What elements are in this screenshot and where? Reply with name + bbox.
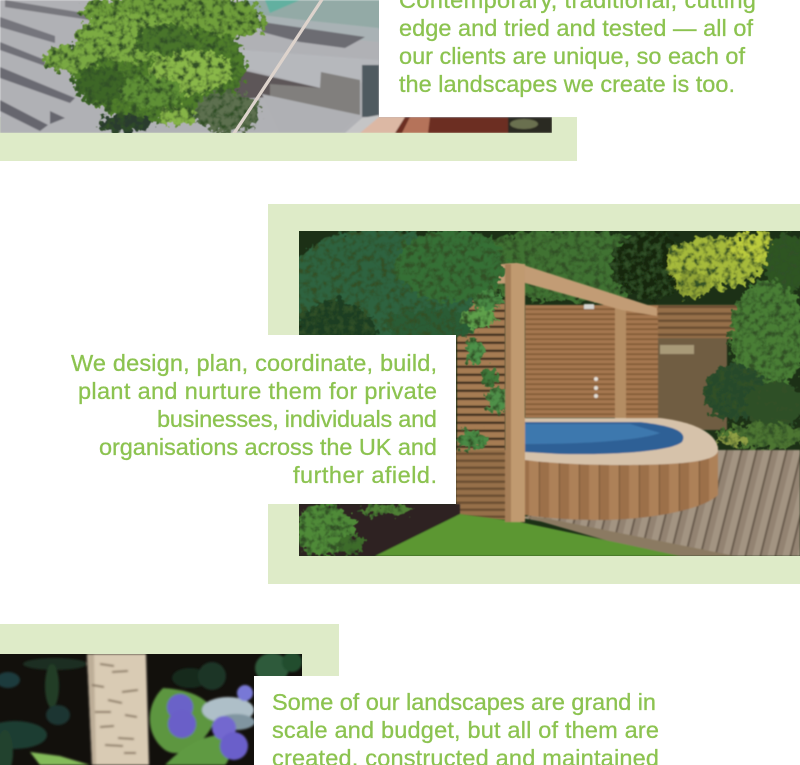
photo: stone steps with tree and glass railing <box>0 0 552 135</box>
timber deck <box>522 450 800 556</box>
text: some of our landscapes paragraph <box>272 689 659 765</box>
text: we design paragraph: We design, plan, coordinate, build, <box>71 350 437 376</box>
text box: white <box>379 0 800 117</box>
text: contemporary paragraph <box>399 0 756 97</box>
text: we design paragraph: plant and nurture them for private <box>78 378 437 404</box>
soil bed <box>299 504 460 556</box>
text: we design paragraph <box>71 350 437 488</box>
text: contemporary paragraph: our clients are unique, so each of <box>399 43 745 69</box>
foreground plants <box>295 504 409 556</box>
text: we design paragraph: further afield. <box>293 462 437 488</box>
green backing frame bottom <box>0 624 339 765</box>
panel: bottom birch and hydrangea section <box>0 624 658 765</box>
tree <box>42 0 267 133</box>
hot tub <box>525 418 718 520</box>
panel: top garden steps section <box>0 0 800 161</box>
text: contemporary paragraph: the landscapes we create is too. <box>399 71 735 97</box>
left climbing foliage and slatted fence cover <box>285 228 514 450</box>
text: we design paragraph: organisations across the UK and <box>99 434 437 460</box>
green backing frame middle <box>268 204 800 584</box>
text: we design paragraph: businesses, individuals and <box>157 406 437 432</box>
back fence and brick wall <box>657 305 757 430</box>
glass railing <box>233 0 323 135</box>
birch trunk <box>87 654 149 765</box>
photo: birch trunk and hydrangea <box>0 652 302 765</box>
lawn <box>375 514 680 556</box>
green leaves <box>30 688 229 765</box>
text: some of our landscapes paragraph: Some of our landscapes are grand in <box>272 689 656 715</box>
panel: middle hot tub section <box>71 204 800 584</box>
right tree and shrubs <box>703 280 800 449</box>
green backing frame top <box>0 117 577 161</box>
hydrangea blossoms <box>167 685 255 760</box>
text: contemporary paragraph: edge and tried and tested — all of <box>399 15 753 41</box>
timber post <box>505 264 525 522</box>
text: some of our landscapes paragraph: scale and budget, but all of them are <box>272 717 659 743</box>
text box: white middle <box>268 335 456 504</box>
text box: white bottom <box>254 676 800 765</box>
photo: timber hot tub garden <box>285 228 800 556</box>
